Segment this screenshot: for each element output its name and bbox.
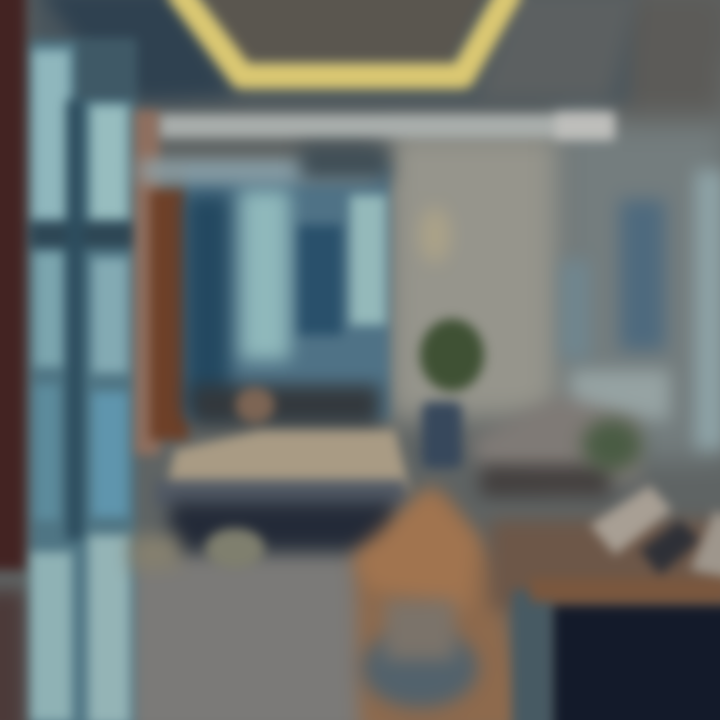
sofa and cushions	[470, 395, 720, 580]
yellow hexagonal ceiling light	[176, 0, 512, 76]
wooden table and stool	[352, 485, 478, 708]
ceiling recess	[195, 0, 490, 62]
blue central wall	[185, 165, 390, 425]
round rug	[362, 628, 478, 708]
right wall art panels	[560, 170, 720, 450]
brown door	[134, 110, 188, 455]
bed	[130, 430, 410, 570]
floor	[120, 490, 720, 720]
plant	[420, 319, 484, 468]
left dark red pillar	[0, 0, 26, 720]
wall light	[419, 207, 451, 263]
white ceiling beam	[140, 112, 615, 182]
ceiling	[30, 0, 640, 105]
window panels	[30, 40, 136, 720]
dark navy cabinet	[512, 578, 720, 720]
